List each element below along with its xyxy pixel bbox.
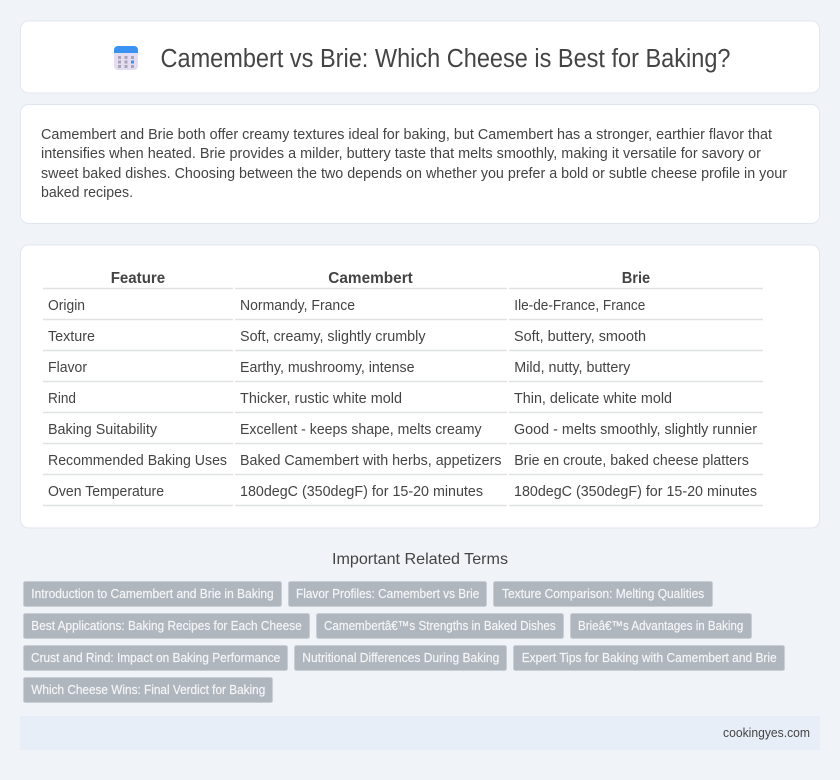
- row: origin: Normandy, France: [240, 298, 355, 314]
- footer source text: cookingyes.com: [723, 726, 810, 740]
- row: flavor: Mild, nutty, buttery: [514, 360, 631, 376]
- row: baking suitability: Good - melts smoothly, slightly runnier: [514, 422, 757, 438]
- tag: [494, 582, 712, 606]
- row: origin: [48, 298, 645, 314]
- tag: Camembertâ€™s Strengths in Baked Dishes: [324, 619, 556, 633]
- row: rind: Rind: [48, 391, 76, 407]
- text block: introduction: [41, 127, 787, 201]
- tag: Expert Tips for Baking with Camembert and Brie: [522, 651, 777, 665]
- table header: Feature: [111, 270, 165, 287]
- heading: related terms: Important Related Terms: [332, 551, 508, 568]
- table header: Camembert: [328, 270, 413, 287]
- text block: introduction: baked recipes.: [41, 185, 133, 201]
- row: recommended baking uses: [48, 453, 749, 469]
- text block: introduction: sweet baked dishes. Choosing between the two depends on whether you prefer a bold or subtle cheese profile in your: [41, 166, 787, 182]
- tag: Texture Comparison: Melting Qualities: [502, 587, 704, 601]
- row: origin: Ile-de-France, France: [514, 298, 645, 314]
- tag: [316, 614, 564, 638]
- tag: [294, 646, 506, 670]
- tag: [514, 646, 784, 670]
- row: oven temperature: 180degC (350degF) for 15-20 minutes: [514, 484, 757, 500]
- row: recommended baking uses: Baked Camembert with herbs, appetizers: [240, 453, 502, 469]
- tag: Brieâ€™s Advantages in Baking: [578, 619, 743, 633]
- row: baking suitability: Baking Suitability: [48, 422, 158, 438]
- table header: Brie: [622, 270, 650, 287]
- row: rind: Thicker, rustic white mold: [240, 391, 402, 407]
- row: flavor: Earthy, mushroomy, intense: [240, 360, 414, 376]
- tag: Flavor Profiles: Camembert vs Brie: [296, 587, 479, 601]
- row: baking suitability: Excellent - keeps shape, melts creamy: [240, 422, 482, 438]
- row: texture: Soft, buttery, smooth: [514, 329, 646, 345]
- icon: calendar: [114, 46, 138, 70]
- tag: Introduction to Camembert and Brie in Baking: [31, 587, 274, 601]
- tag: [24, 614, 310, 638]
- row: rind: Thin, delicate white mold: [514, 391, 672, 407]
- tag: [24, 646, 288, 670]
- tag: Best Applications: Baking Recipes for Each Cheese: [31, 619, 302, 633]
- row: origin: Origin: [48, 298, 85, 314]
- row: oven temperature: Oven Temperature: [48, 484, 164, 500]
- panel: comparison table: [20, 245, 820, 528]
- text block: introduction: Camembert and Brie both offer creamy textures ideal for baking, but Camembert has a stronger, earthier flavor that: [41, 127, 772, 143]
- row: oven temperature: [48, 484, 757, 500]
- tag: Nutritional Differences During Baking: [302, 651, 499, 665]
- tag: [288, 582, 486, 606]
- row: recommended baking uses: Brie en croute, baked cheese platters: [514, 453, 749, 469]
- row: oven temperature: 180degC (350degF) for 15-20 minutes: [240, 484, 483, 500]
- row: recommended baking uses: Recommended Baking Uses: [48, 453, 227, 469]
- tag list: related terms: [24, 582, 784, 702]
- row: texture: Texture: [48, 329, 95, 345]
- tag: [24, 582, 282, 606]
- title: Camembert vs Brie: Which Cheese is Best for Baking?: [160, 45, 730, 73]
- row: flavor: [48, 360, 631, 376]
- tag: Which Cheese Wins: Final Verdict for Baking: [31, 683, 265, 697]
- row: baking suitability: [48, 422, 757, 438]
- row: texture: [48, 329, 646, 345]
- text block: introduction: intensifies when heated. Brie provides a milder, buttery taste that melts smoothly, making it versatile for savory or: [41, 146, 761, 162]
- footer: [20, 716, 820, 750]
- row: texture: Soft, creamy, slightly crumbly: [240, 329, 426, 345]
- tag: Crust and Rind: Impact on Baking Performance: [31, 651, 280, 665]
- row: flavor: Flavor: [48, 360, 87, 376]
- row: rind: [48, 391, 672, 407]
- tag: [24, 678, 272, 702]
- tag: [570, 614, 752, 638]
- table header: [111, 270, 650, 287]
- panel: introduction: [20, 104, 820, 224]
- panel: header: [20, 21, 820, 93]
